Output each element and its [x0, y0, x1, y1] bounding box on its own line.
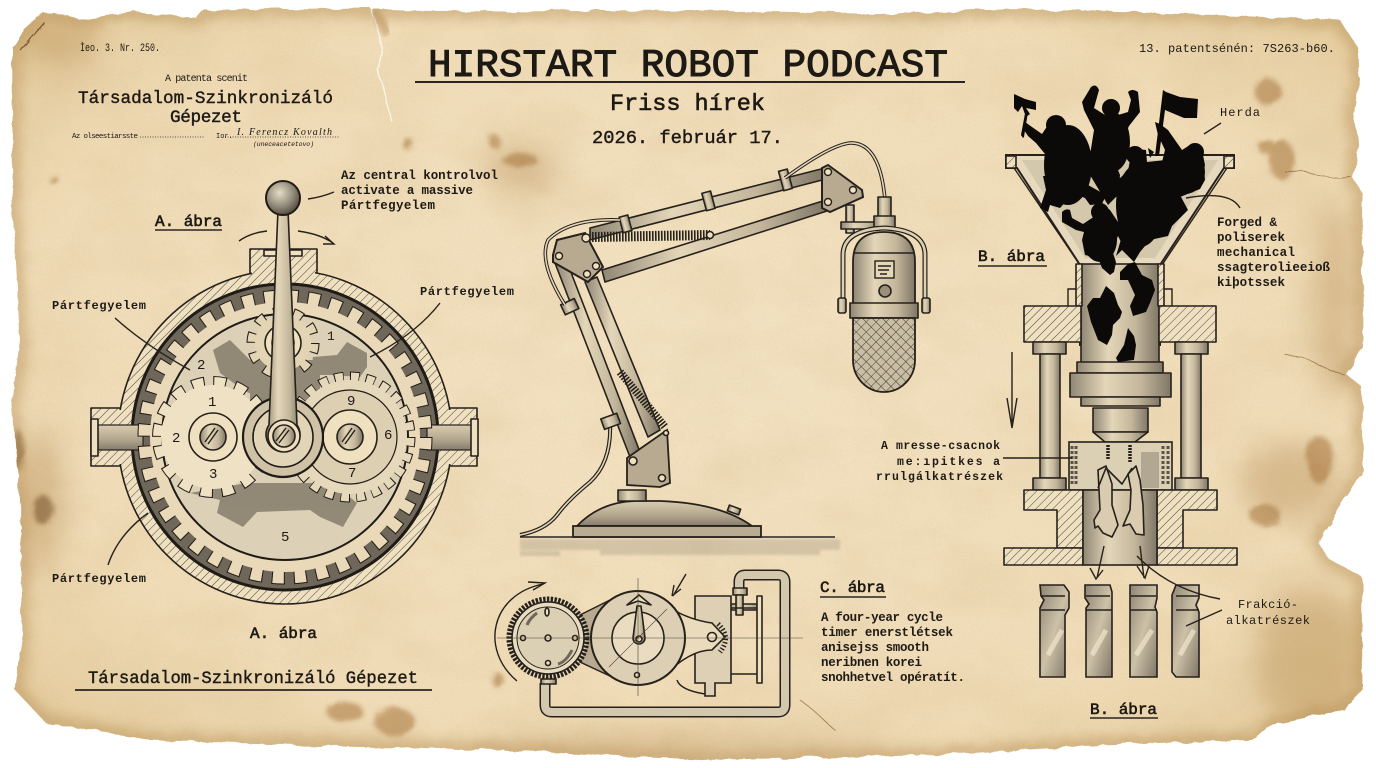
callout: press parts: [876, 440, 1072, 484]
date: 2026. február 17.: [592, 127, 783, 149]
raised arms figure: [1082, 86, 1140, 205]
label: fraction parts: Frakció-: [1238, 598, 1298, 612]
block: patent heading top left: Az olseestiarsste: [72, 133, 138, 141]
wash shadows behind gears: [190, 340, 367, 527]
callout: press parts: A mresse-csacnok: [881, 440, 1000, 453]
arrow: rotation: [239, 231, 334, 244]
text: figure C description: neribnen korei: [821, 656, 922, 670]
output fraction parts: [1040, 585, 1199, 677]
text: figure C description: anisejss smooth: [821, 641, 929, 655]
callout: forged parts: ssagterolieeioß: [1217, 261, 1330, 275]
label: fraction parts: [1137, 556, 1310, 628]
labels: Pártfegyelem: Pártfegyelem: [52, 299, 146, 313]
arrow: rotation and pointer: [495, 574, 686, 681]
cable to base: [520, 422, 610, 535]
text: figure C description: timer enerstlétsek: [821, 626, 953, 640]
toothed ring: [145, 297, 425, 577]
heading: figure A top: A. ábra: [155, 213, 222, 231]
callout: press parts: me:ıpitkes a: [897, 456, 1000, 469]
casing with hatched walls: [91, 249, 477, 604]
block: patent heading top left: Gépezet: [170, 108, 242, 128]
left gear: [158, 382, 268, 492]
gear numbers: 2: [172, 431, 180, 447]
block: patent heading top left: (uneceacetetovo): [253, 141, 314, 148]
text: top right patent number: 13. patentsénén: 7S263-b60.: [1139, 42, 1335, 56]
diagram: figure A gear machine: [91, 181, 478, 604]
callout: central control: activate a massive: [341, 184, 473, 198]
crushed figures in mould: [1094, 466, 1144, 537]
callout: forged parts: Forged &: [1217, 216, 1277, 230]
callout: forged parts: mechanical: [1217, 246, 1295, 260]
callout: forged parts: [1186, 196, 1330, 290]
labels: Pártfegyelem: Pártfegyelem: [52, 572, 146, 586]
text: figure C description: snohhetvel opératít.: [821, 671, 965, 685]
block: patent heading top left: I. Ferencz Kovalth: [236, 127, 332, 138]
microphone: [838, 197, 930, 392]
callout: forged parts: kiþotssek: [1217, 276, 1285, 290]
heading: figure A bottom: A. ábra: [250, 625, 317, 643]
funnel: [1006, 155, 1234, 364]
text: issue number: Ìeo. 3. Nr. 250.: [80, 41, 160, 55]
block: patent heading top left: [72, 73, 340, 148]
labels: Pártfegyelem: Pártfegyelem: [420, 285, 514, 299]
label: herd: [1204, 106, 1260, 134]
flag figure: [1155, 90, 1205, 205]
connector: [580, 600, 610, 676]
left dial: [509, 599, 587, 684]
upper arm: [553, 165, 863, 282]
gear numbers: 1: [208, 395, 216, 411]
arm to housing: [665, 608, 725, 675]
callout: press parts: rrulgálkatrészek: [876, 471, 1003, 484]
pipework: [545, 575, 785, 712]
diagram: figure B press and funnel: [1004, 86, 1237, 677]
central figure: [1104, 149, 1188, 262]
lower arm: [555, 262, 670, 487]
right gear: [290, 377, 410, 497]
block: patent heading top left: Ior.: [216, 133, 233, 141]
crowd body masses: [1044, 99, 1205, 262]
gear numbers: [172, 329, 392, 546]
lever with ball knob: [266, 181, 300, 452]
side press arrow: [1007, 352, 1017, 428]
shadow wash: [520, 539, 840, 556]
columns: [1033, 342, 1208, 490]
label: herd: Herda: [1220, 106, 1260, 120]
mould block: [1069, 442, 1172, 490]
base: [573, 490, 761, 537]
gear numbers: 2: [197, 358, 205, 374]
gear numbers: 6: [384, 428, 392, 444]
gear numbers: 7: [348, 466, 356, 482]
heading: figure C: C. ábra: [820, 579, 885, 597]
housing: [695, 596, 731, 696]
text: figure C description: [821, 611, 965, 685]
arrows down: [1090, 546, 1149, 579]
callout: central control: Az central kontrolvol: [341, 169, 498, 183]
gear numbers: 9: [347, 394, 355, 410]
falling figures in neck: [1120, 262, 1155, 316]
gear numbers: 3: [209, 467, 217, 483]
callout: central control: [308, 169, 498, 213]
small top gear: [252, 312, 314, 374]
block: patent heading top left: Társadalom-Szinkronizáló: [78, 89, 333, 109]
diagram: figure C timer mechanism: [495, 574, 803, 712]
lower figure: [1062, 207, 1130, 275]
middle dial: [591, 591, 716, 685]
crowd silhouettes entering the funnel: [1014, 86, 1205, 362]
subtitle: fresh news: Friss hírek: [610, 91, 765, 118]
side shafts and top bushing: [91, 250, 478, 456]
heading: figure B side: B. ábra: [978, 248, 1045, 266]
gear numbers: 1: [327, 329, 335, 344]
illustration: robot podcast microphone arm: [520, 143, 930, 556]
callout: central control: Pártfegyelem: [341, 199, 435, 213]
labels: Pártfegyelem: [52, 285, 514, 586]
label: fraction parts: alkatrészek: [1226, 614, 1310, 628]
flange: [1024, 289, 1216, 342]
heading: figure B bottom: B. ábra: [1090, 701, 1157, 719]
joint plates: [553, 233, 603, 282]
base: [1004, 490, 1237, 565]
gear numbers: 5: [281, 530, 289, 546]
press ram: [1070, 362, 1171, 442]
leader lines: [108, 303, 440, 565]
text: figure C description: A four-year cycle: [821, 611, 943, 625]
callout: forged parts: poliserek: [1217, 231, 1285, 245]
central hub: [243, 397, 323, 477]
block: patent heading top left: A patenta scenit: [165, 73, 248, 85]
axe figure: [1014, 94, 1106, 212]
caption: machine name: Társadalom-Szinkronizáló Gépezet: [88, 670, 418, 689]
title: HIRSTART ROBOT PODCAST: [428, 44, 948, 88]
cable over boom: [545, 143, 885, 305]
